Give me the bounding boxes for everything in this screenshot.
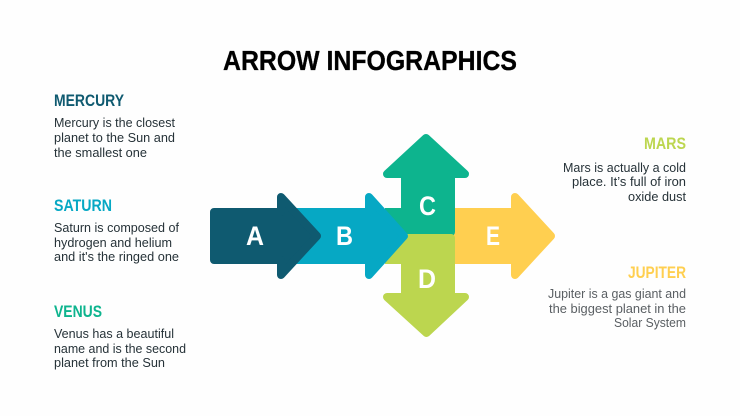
text block: Saturn: hydrogen and helium [54, 235, 172, 250]
text block: Mars: oxide dust [628, 189, 686, 204]
text block: Venus: planet from the Sun [54, 355, 165, 370]
title: ARROW INFOGRAPHICS [223, 45, 517, 76]
text block: Mercury: Mercury is the closest [54, 115, 175, 130]
text block: Jupiter: Solar System [614, 315, 686, 330]
text block: Saturn: Saturn is composed of [54, 220, 179, 235]
text block: Jupiter: JUPITER [628, 264, 686, 282]
text block: Mars: MARS [644, 135, 686, 153]
arrow E [450, 197, 551, 275]
text block: Mercury: MERCURY [54, 92, 124, 110]
text block: Saturn: and it's the ringed one [54, 249, 179, 264]
text block: Mercury: the smallest one [54, 145, 147, 160]
text block: Mercury: planet to the Sun and [54, 130, 175, 145]
text block: Venus: VENUS [54, 303, 102, 321]
arrow A [214, 197, 317, 275]
arrow B: B [336, 221, 353, 251]
text block: Mars: Mars is actually a cold [563, 160, 686, 175]
arrow D [385, 236, 465, 333]
text block: Venus [54, 303, 186, 370]
text block: Venus: name and is the second [54, 341, 186, 356]
arrow E: E [486, 221, 500, 251]
arrow diagram [214, 138, 551, 333]
arrow D: D [418, 264, 436, 294]
arrow A: A [246, 221, 264, 251]
arrow C [385, 138, 465, 236]
text block: Jupiter [548, 264, 686, 330]
text block: Venus: Venus has a beautiful [54, 326, 174, 341]
arrow C: C [419, 191, 436, 221]
arrow B [290, 197, 404, 275]
text block: Mars [563, 135, 686, 204]
text block: Saturn: SATURN [54, 197, 112, 215]
text block: Jupiter: the biggest planet in the [549, 301, 686, 316]
text block: Mercury [54, 92, 175, 160]
text block: Saturn [54, 197, 179, 264]
text block: Jupiter: Jupiter is a gas giant and [548, 286, 686, 301]
text block: Mars: place. It’s full of iron [572, 174, 686, 189]
